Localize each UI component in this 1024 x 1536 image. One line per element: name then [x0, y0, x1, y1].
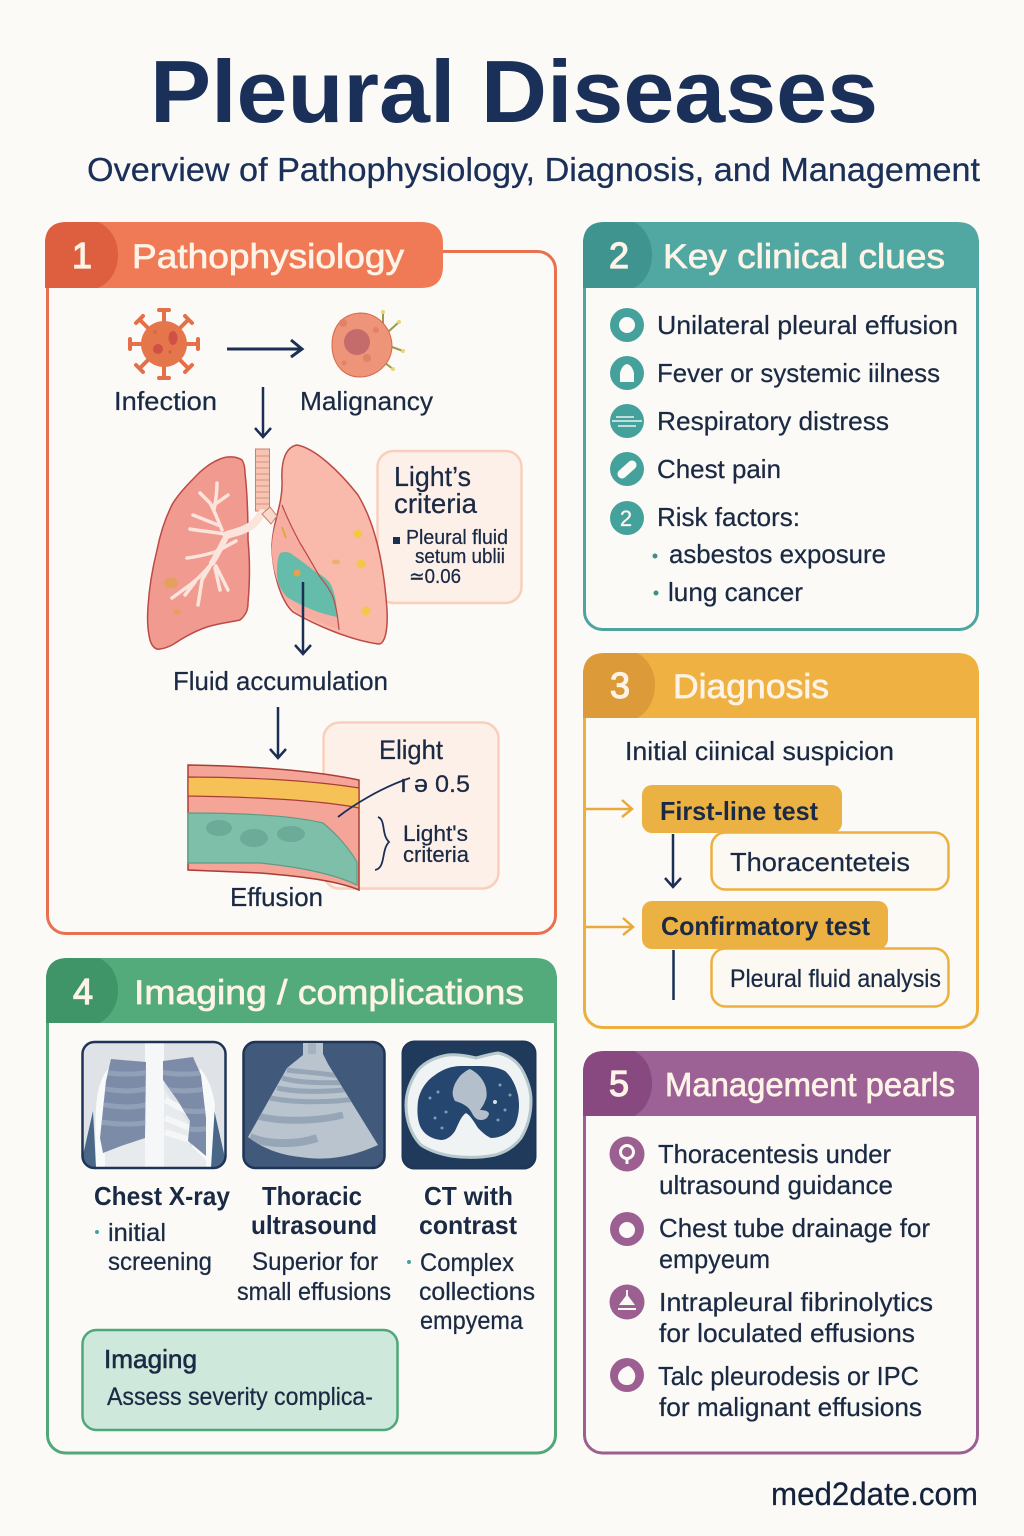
callout: light's criteria: Pleural fluid [406, 527, 508, 549]
callout: light's criteria: setum ublii [415, 546, 505, 568]
panel: pathophysiology [45, 222, 556, 934]
text: ct with contrast: empyema [420, 1307, 523, 1335]
text: chest x-ray: Chest X-ray [94, 1181, 231, 1211]
callout: elight: Light's [403, 821, 468, 846]
header: key clinical clues [583, 222, 979, 288]
brace [375, 817, 389, 870]
pearl: thoracentesis [610, 1136, 893, 1200]
clue: chest pain: Chest pain [657, 454, 781, 484]
box: pleural fluid analysis: Pleural fluid analysis [730, 965, 941, 993]
pearl: chest tube [610, 1212, 930, 1274]
pearl: chest tube: empyeum [659, 1244, 770, 1274]
text: thoracic ultrasound: Superior for [252, 1248, 378, 1276]
nodules [354, 530, 362, 538]
text: ct with contrast: contrast [419, 1210, 517, 1240]
callout: imaging: Assess severity complica- [107, 1383, 373, 1411]
panel: management pearls [583, 1051, 979, 1453]
header: diagnosis: Diagnosis [673, 668, 829, 706]
pearl: chest tube: Chest tube drainage for [659, 1213, 930, 1243]
subtitle: Overview of Pathophysiology, Diagnosis, and Management [87, 151, 980, 188]
text: chest x-ray [94, 1181, 231, 1276]
header: management pearls [583, 1051, 979, 1116]
text: ct with contrast: Complex [420, 1249, 514, 1277]
pearl: fibrinolytics [610, 1284, 933, 1348]
arrow: first-line to confirmatory [665, 834, 681, 887]
header: imaging: 4 [73, 971, 93, 1012]
arrow: to confirmatory test [586, 918, 633, 935]
image: thoracic ultrasound [244, 1042, 384, 1168]
text: initial clinical suspicion: Initial ciinical suspicion [625, 736, 894, 766]
callout: elight [324, 722, 498, 888]
text: infection: Infection [114, 386, 217, 416]
label: first-line test [642, 785, 842, 833]
panel: imaging / complications [46, 958, 557, 1453]
arrow: to effusion [270, 707, 286, 758]
clue: risk factors [610, 501, 800, 535]
label: first-line test: First-line test [660, 796, 818, 826]
clue: respiratory distress: Respiratory distress [657, 406, 889, 436]
callout: light's criteria: Light’s [394, 461, 471, 492]
connector line [672, 950, 675, 1000]
arrow: to lungs [255, 387, 271, 437]
header: key clinical clues: Key clinical clues [663, 238, 945, 276]
arrow: to first-line test [586, 800, 632, 817]
pearl: talc pleurodesis: Talc pleurodesis or IPC [658, 1361, 919, 1391]
text: thoracic ultrasound: Thoracic [262, 1181, 362, 1211]
risk: asbestos exposure: asbestos exposure [669, 539, 886, 569]
text: thoracic ultrasound: small effusions [237, 1278, 391, 1306]
image: chest x-ray [82, 1042, 226, 1168]
text: malignancy: Malignancy [300, 386, 433, 416]
header: management pearls: 5 [609, 1063, 629, 1104]
text: effusion: Effusion [230, 882, 323, 912]
right lung [272, 445, 387, 644]
callout: imaging [82, 1330, 398, 1430]
panel: diagnosis [583, 653, 979, 1028]
callout: elight: Elight [379, 735, 443, 765]
text: ct with contrast: collections [419, 1278, 535, 1306]
header: diagnosis [583, 653, 979, 718]
header: management pearls: Management pearls [665, 1066, 955, 1103]
header: imaging [46, 958, 557, 1023]
callout: light's criteria: criteria [394, 488, 477, 519]
lower lobe shading [272, 503, 338, 629]
clue: unilateral pleural effusion: Unilateral pleural effusion [657, 310, 958, 340]
clue: chest pain [610, 452, 781, 486]
clue: risk factors: Risk factors: [657, 502, 800, 532]
arrow: lungs to fluid [295, 582, 311, 654]
risk: lung cancer: lung cancer [668, 577, 803, 607]
text: chest x-ray: initial [108, 1219, 166, 1247]
callout: light's criteria [378, 451, 522, 603]
header: key clinical clues: 2 [609, 235, 629, 276]
pearl: talc pleurodesis [610, 1358, 922, 1422]
icon: malignant cell [332, 310, 405, 377]
text: thoracic ultrasound [237, 1181, 391, 1306]
text: fluid accumulation: Fluid accumulation [173, 666, 388, 696]
icon: infection virus [130, 310, 198, 378]
illustration: pleural layers [188, 765, 410, 890]
callout: elight: ı ə 0.5 [400, 771, 470, 798]
box: pleural fluid analysis [712, 948, 948, 1006]
pearl: fibrinolytics: for loculated effusions [659, 1318, 915, 1348]
text: thoracic ultrasound: ultrasound [251, 1210, 377, 1240]
bronchial tree [172, 483, 262, 605]
clue: fever: Fever or systemic iilness [657, 358, 940, 388]
title: Pleural Diseases [150, 42, 878, 141]
trachea [256, 449, 270, 511]
text: ct with contrast [407, 1181, 535, 1335]
effusion fluid [277, 552, 337, 617]
callout: light's criteria: ≃0.06 [409, 566, 461, 588]
pearl: thoracentesis: ultrasound guidance [659, 1170, 893, 1200]
text: chest x-ray: screening [108, 1248, 212, 1276]
header: pathophysiology [45, 222, 443, 288]
header: pathophysiology: 1 [72, 235, 92, 276]
pearl: fibrinolytics: Intrapleural fibrinolytics [659, 1287, 933, 1317]
pearl: talc pleurodesis: for malignant effusions [659, 1392, 922, 1422]
clue: risk factors: 2 [620, 506, 632, 531]
text: ct with contrast: CT with [424, 1181, 513, 1211]
header: imaging: Imaging / complications [134, 974, 524, 1012]
footer: source: med2date.com [771, 1476, 978, 1512]
pearl: thoracentesis: Thoracentesis under [658, 1139, 891, 1169]
box: thoracentesis: Thoracenteteis [730, 847, 910, 877]
box: thoracentesis [712, 832, 948, 890]
label: confirmatory test: Confirmatory test [661, 911, 870, 941]
illustration: lungs [148, 445, 387, 649]
arrow: infection to malignancy [227, 340, 302, 357]
label: confirmatory test [642, 901, 888, 949]
header: pathophysiology: Pathophysiology [132, 238, 404, 276]
image: ct with contrast [402, 1042, 536, 1168]
callout: imaging: Imaging [104, 1344, 197, 1374]
header: diagnosis: 3 [610, 665, 630, 706]
panel: key clinical clues [583, 222, 979, 630]
left lung [148, 457, 250, 649]
callout: elight: criteria [403, 842, 470, 867]
